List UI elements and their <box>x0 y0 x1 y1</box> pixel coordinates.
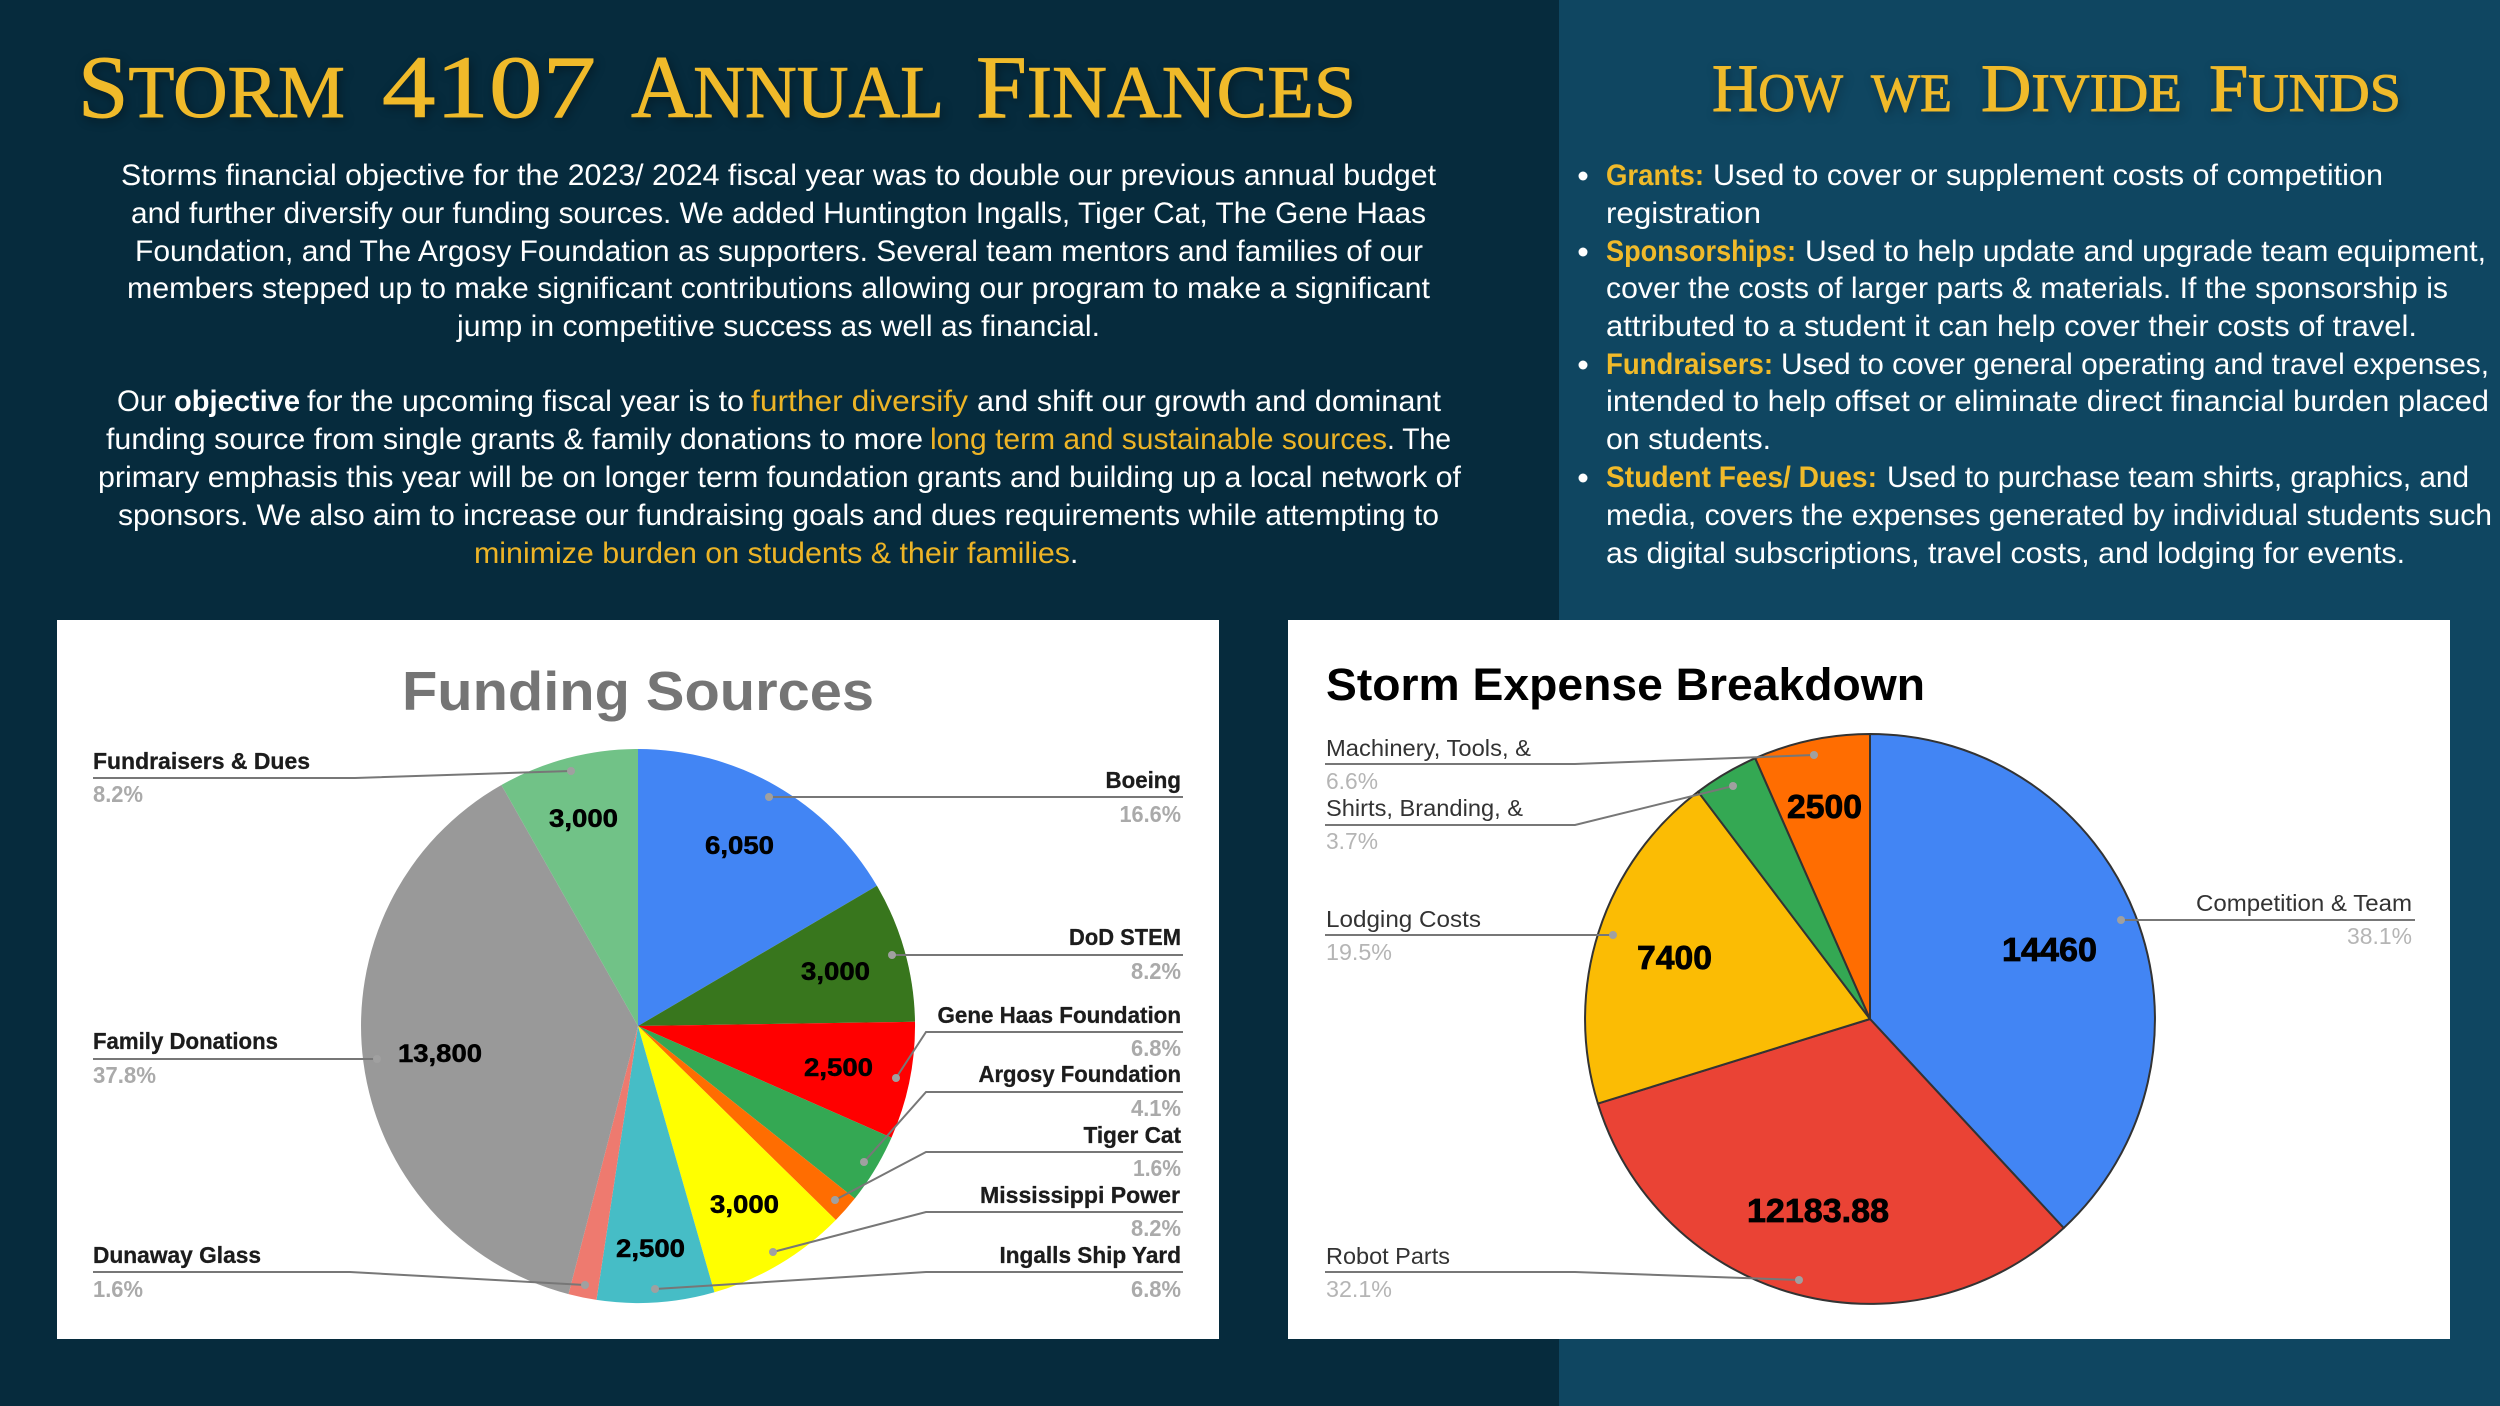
label: Gene Haas Foundation: 6.8% <box>1131 1035 1181 1061</box>
slice values: expenses: 12183.88 <box>1747 1192 1889 1229</box>
label: Gene Haas Foundation <box>892 1002 1183 1082</box>
bullet list: how funds are divided <box>1578 159 2492 570</box>
label: Lodging Costs: Lodging Costs <box>1326 906 1481 932</box>
label: Shirts, Branding, &: Shirts, Branding, & <box>1326 795 1523 821</box>
label: Argosy Foundation: Argosy Foundation <box>978 1061 1181 1087</box>
bullet: Grants: Used to cover or supplement costs of competition <box>1713 159 2383 192</box>
background: left dark panel <box>0 0 1559 1406</box>
label: Shirts, Branding, & <box>1325 782 1737 854</box>
slice: Boeing <box>638 749 877 1026</box>
label: Robot Parts: Robot Parts <box>1326 1243 1450 1269</box>
text block: objective for upcoming fiscal year: sponsors. We also aim to increase our fundraising goals and dues requirements while attempting to <box>118 499 1439 532</box>
heading: How we Divide Funds <box>1712 50 2401 126</box>
bullet: Student Fees / Dues: as digital subscriptions, travel costs, and lodging for events. <box>1606 537 2405 570</box>
label: Tiger Cat: Tiger Cat <box>1084 1122 1181 1148</box>
label: Family Donations <box>93 1028 381 1088</box>
label: Ingalls Ship Yard <box>651 1242 1183 1302</box>
slice values: expenses: 7400 <box>1637 939 1712 976</box>
bullet: Fundraisers: Fundraisers: <box>1606 348 1773 381</box>
label: Dunaway Glass: 1.6% <box>93 1276 143 1302</box>
label: Tiger Cat: 1.6% <box>1133 1155 1181 1181</box>
slice values: funding sources: 13,800 <box>398 1040 482 1068</box>
label: Machinery, Tools, &: 6.6% <box>1326 768 1378 794</box>
slice: Lodging Costs <box>1585 792 1870 1104</box>
label: Argosy Foundation <box>860 1061 1183 1166</box>
label: DoD STEM: DoD STEM <box>1069 924 1181 950</box>
text block: objective for upcoming fiscal year: objective <box>174 385 300 418</box>
label: Competition & Team: 38.1% <box>2347 923 2412 949</box>
label: Competition & Team <box>2117 890 2415 949</box>
chart title: Funding Sources: Funding Sources <box>402 660 874 722</box>
label: Lodging Costs: 19.5% <box>1326 939 1392 965</box>
label: Mississippi Power: Mississippi Power <box>980 1182 1180 1208</box>
label: Gene Haas Foundation: Gene Haas Foundation <box>938 1002 1181 1028</box>
bullet: Student Fees / Dues: media, covers the expenses generated by individual students such <box>1606 499 2492 532</box>
label: Dunaway Glass: Dunaway Glass <box>93 1242 261 1268</box>
text block: objective for upcoming fiscal year: long term and sustainable sources <box>930 423 1387 456</box>
slice values: expenses: 14460 <box>2002 931 2097 968</box>
label: Machinery, Tools, &: Machinery, Tools, & <box>1326 735 1531 761</box>
bullet: Grants: Grants: <box>1606 159 1704 192</box>
label: Machinery, Tools, & <box>1325 735 1818 794</box>
background: right blue panel <box>1559 0 2500 1406</box>
bullet: Fundraisers: Used to cover general operating and travel expenses, <box>1781 348 2489 381</box>
label: Boeing: Boeing <box>1106 767 1181 793</box>
pie chart: funding sources <box>361 749 915 1303</box>
slice values: expenses <box>1637 788 2097 1229</box>
bullet: Fundraisers: on students. <box>1606 423 1771 456</box>
slice: Ingalls Ship Yard <box>596 1026 714 1303</box>
slice values: funding sources: 6,050 <box>705 832 774 860</box>
bullet: Grants: registration <box>1606 197 1761 230</box>
heading: How we Divide Funds: WE <box>1871 63 1952 123</box>
text block: objective for upcoming fiscal year: Our <box>117 385 166 418</box>
label: DoD STEM <box>888 924 1183 984</box>
title: Storm 4107 Annual Finances: 4107 <box>382 39 596 137</box>
text block: objective for upcoming fiscal year: minimize burden on students & their families <box>474 537 1070 570</box>
text block: financial objective for 2023/2024: and further diversify our funding sources. We added Huntington Ingalls, Tiger Cat, The Gene Haas <box>131 197 1426 230</box>
slice: Shirts, Branding <box>1698 758 1870 1019</box>
text block: objective for upcoming fiscal year: primary emphasis this year will be on longer term foundation grants and building up a local network of <box>98 461 1462 494</box>
text block: objective for upcoming fiscal year: further diversify <box>751 385 968 418</box>
slice values: funding sources: 2,500 <box>804 1054 873 1082</box>
label: Argosy Foundation: 4.1% <box>1131 1095 1181 1121</box>
bullet: Student Fees / Dues: Student Fees/ Dues: <box>1606 461 1877 494</box>
slice values: funding sources: 3,000 <box>710 1191 779 1219</box>
label: Ingalls Ship Yard: Ingalls Ship Yard <box>1000 1242 1181 1268</box>
label: DoD STEM: 8.2% <box>1131 958 1181 984</box>
bullet: Sponsorships <box>1578 235 2486 343</box>
bullet: Student Fees / Dues <box>1578 461 2492 570</box>
slice: Family Donations <box>361 785 638 1294</box>
heading: How we Divide Funds: HOW <box>1712 50 1843 126</box>
panel: Storm Expense Breakdown chart <box>1288 620 2450 1339</box>
title: Storm 4107 Annual Finances: ANNUAL <box>631 39 944 137</box>
title: Storm 4107 Annual Finances <box>78 39 1356 137</box>
panel: Funding Sources chart <box>57 620 1219 1339</box>
label: Tiger Cat <box>831 1122 1183 1204</box>
label: Ingalls Ship Yard: 6.8% <box>1131 1276 1181 1302</box>
pie chart: expenses <box>1585 734 2155 1304</box>
label: Dunaway Glass <box>93 1242 589 1302</box>
label: Robot Parts: 32.1% <box>1326 1276 1392 1302</box>
text block: financial objective for 2023/2024 <box>121 159 1437 343</box>
label: Fundraisers & Dues <box>93 748 575 807</box>
bullet: Fundraisers: intended to help offset or eliminate direct financial burden placed <box>1606 385 2489 418</box>
text block: objective for upcoming fiscal year <box>98 385 1462 570</box>
slice: Robot Parts <box>1598 1019 2064 1304</box>
text block: financial objective for 2023/2024: Foundation, and The Argosy Foundation as supporters. Several team mentors and families of our <box>135 235 1423 268</box>
label: Family Donations: Family Donations <box>93 1028 278 1054</box>
label: Mississippi Power <box>769 1182 1183 1256</box>
text block: financial objective for 2023/2024: jump in competitive success as well as financial. <box>456 310 1100 343</box>
slice: Argosy Foundation <box>638 1026 892 1198</box>
slice values: funding sources: 3,000 <box>549 805 618 833</box>
label: Competition & Team: Competition & Team <box>2196 890 2412 916</box>
slice: Machinery, Tools <box>1755 734 1870 1019</box>
label: Mississippi Power: 8.2% <box>1131 1215 1181 1241</box>
slice: Mississippi Power <box>638 1026 836 1292</box>
bullet: Grants <box>1578 159 2383 230</box>
text block: objective for upcoming fiscal year: and shift our growth and dominant <box>977 385 1442 418</box>
bullet: Student Fees / Dues: Used to purchase team shirts, graphics, and <box>1887 461 2469 494</box>
slice: Gene Haas Foundation <box>638 1022 915 1138</box>
text block: financial objective for 2023/2024: Storms financial objective for the 2023/ 2024 fiscal year was to double our previous annual budget <box>121 159 1437 192</box>
text block: objective for upcoming fiscal year: . <box>1070 537 1078 570</box>
slice: Dunaway Glass <box>568 1026 638 1300</box>
slice values: funding sources: 2,500 <box>616 1235 685 1263</box>
bullet: Sponsorships: Sponsorships: <box>1606 235 1796 268</box>
chart title: Storm Expense Breakdown: Storm Expense Breakdown <box>1326 659 1925 710</box>
label: Shirts, Branding, &: 3.7% <box>1326 828 1378 854</box>
label: Lodging Costs <box>1325 906 1617 965</box>
slice: Tiger Cat <box>638 1026 855 1220</box>
bullet: Sponsorships: Used to help update and upgrade team equipment, <box>1805 235 2486 268</box>
slice: Competition & Team <box>1870 734 2155 1228</box>
label: Fundraisers & Dues: Fundraisers & Dues <box>93 748 310 774</box>
slice: DoD STEM <box>638 886 915 1026</box>
text block: objective for upcoming fiscal year: for the upcoming fiscal year is to <box>307 385 744 418</box>
label: Robot Parts <box>1325 1243 1803 1302</box>
label: Family Donations: 37.8% <box>93 1062 156 1088</box>
slice values: funding sources: 3,000 <box>801 958 870 986</box>
bullet: Sponsorships: cover the costs of larger parts & materials. If the sponsorship is <box>1606 272 2448 305</box>
heading: How we Divide Funds: FUNDS <box>2209 50 2401 126</box>
slice values: funding sources <box>398 805 873 1263</box>
title: Storm 4107 Annual Finances: FINANCES <box>976 39 1356 137</box>
slice values: expenses: 2500 <box>1787 788 1862 825</box>
label: Boeing: 16.6% <box>1120 801 1181 827</box>
text block: objective for upcoming fiscal year: funding source from single grants & family donations to more <box>106 423 923 456</box>
label: Boeing <box>765 767 1183 827</box>
text block: financial objective for 2023/2024: members stepped up to make significant contributions allowing our program to make a significant <box>127 272 1431 305</box>
title: Storm 4107 Annual Finances: STORM <box>78 39 345 137</box>
bullet: Sponsorships: attributed to a student it can help cover their costs of travel. <box>1606 310 2417 343</box>
heading: How we Divide Funds: DIVIDE <box>1981 50 2182 126</box>
bullet: Fundraisers <box>1578 348 2489 456</box>
text block: objective for upcoming fiscal year: . The <box>1387 423 1451 456</box>
label: Fundraisers & Dues: 8.2% <box>93 781 143 807</box>
slice: Fundraisers and Dues <box>501 749 638 1026</box>
